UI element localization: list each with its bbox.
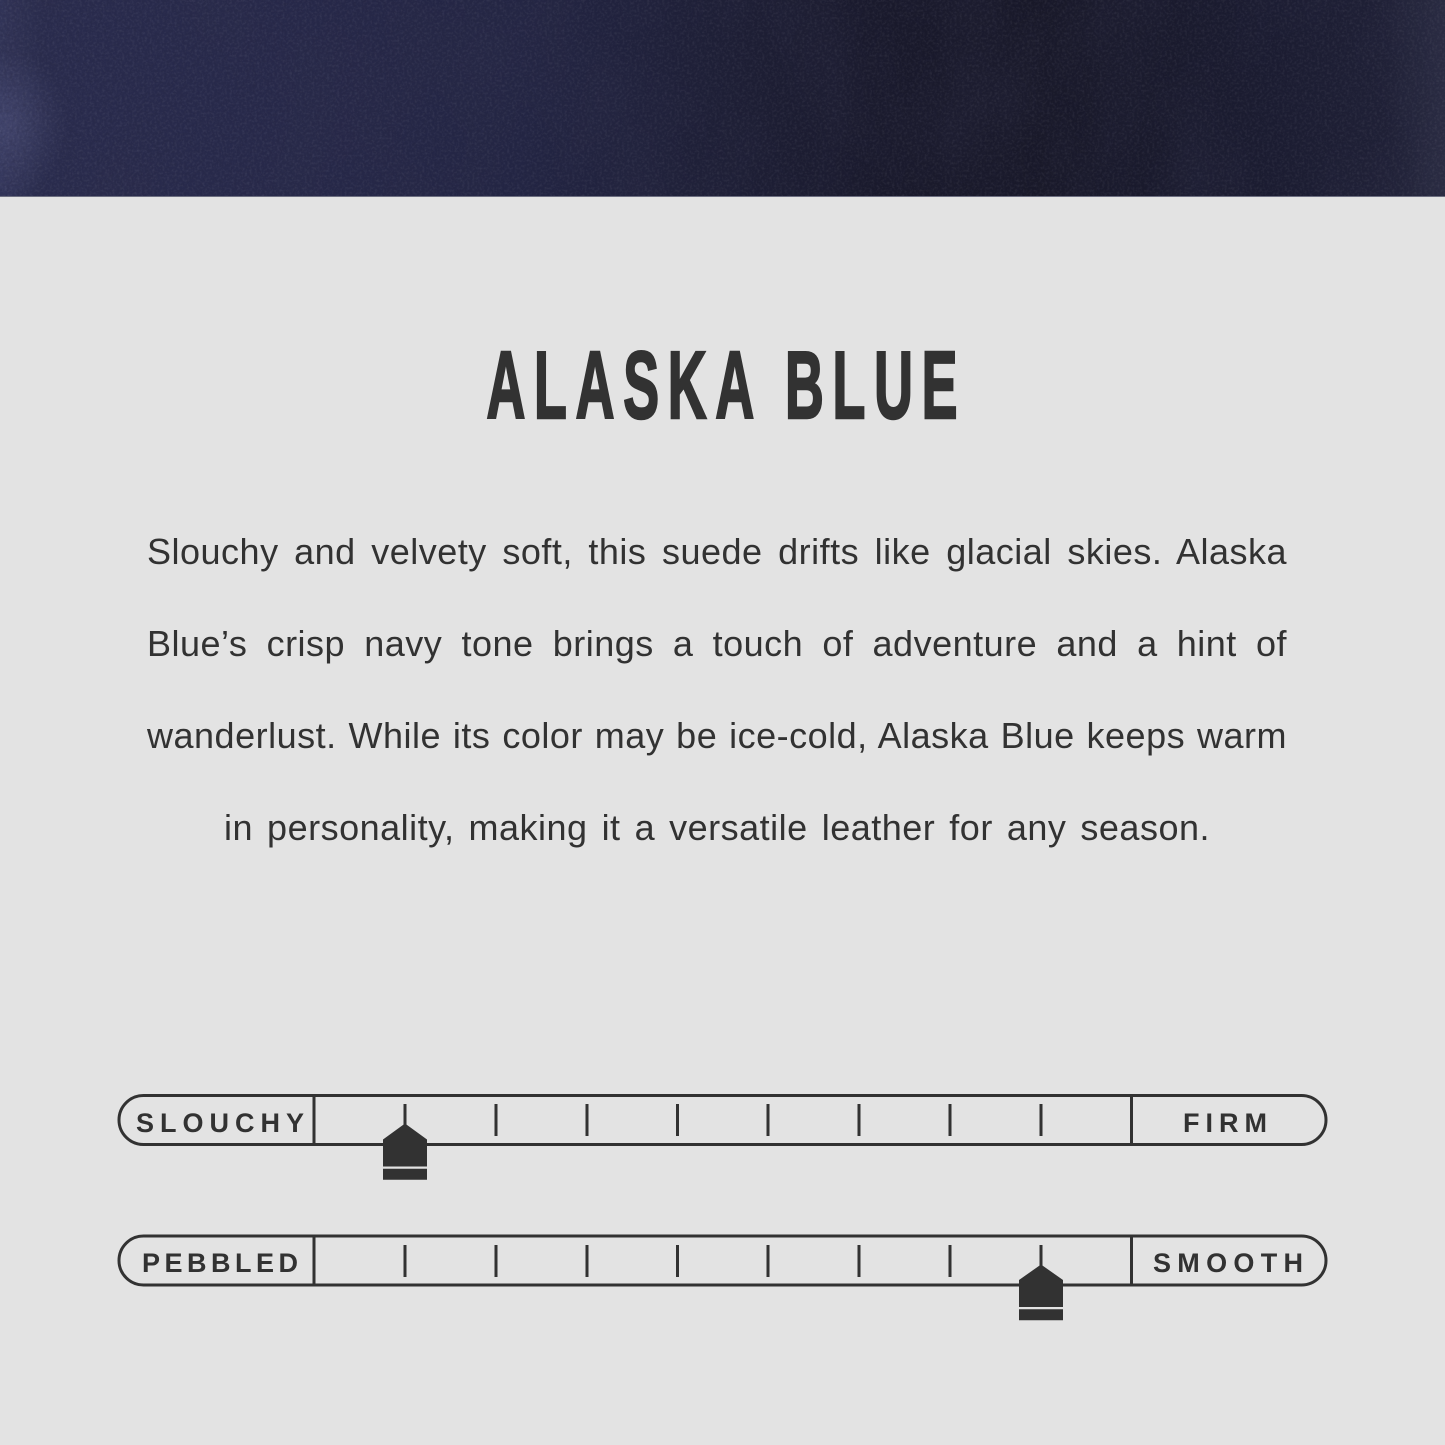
scale track bbox=[119, 1096, 1326, 1144]
description text bbox=[147, 531, 1287, 848]
title bbox=[486, 333, 957, 439]
description text: wanderlust. While its color may be ice-cold, Alaska Blue keeps warm bbox=[147, 715, 1287, 756]
label: firm: FIRM bbox=[1183, 1108, 1267, 1138]
scale track bbox=[119, 1236, 1326, 1285]
label: smooth: SMOOTH bbox=[1153, 1248, 1303, 1278]
title: BLUE bbox=[785, 333, 957, 439]
scale: pebbled to smooth bbox=[119, 1236, 1326, 1320]
scale: slouchy to firm bbox=[119, 1096, 1326, 1180]
banner: navy suede texture bbox=[0, 0, 1445, 197]
description text: Blue’s crisp navy tone brings a touch of adventure and a hint of bbox=[147, 623, 1287, 664]
title: ALASKA bbox=[486, 333, 754, 439]
description text: in personality, making it a versatile leather for any season. bbox=[224, 807, 1210, 848]
marker bbox=[1019, 1264, 1063, 1320]
marker bbox=[383, 1124, 427, 1180]
label: pebbled: PEBBLED bbox=[142, 1248, 298, 1278]
label: slouchy: SLOUCHY bbox=[136, 1108, 304, 1138]
description text: Slouchy and velvety soft, this suede drifts like glacial skies. Alaska bbox=[147, 531, 1287, 572]
